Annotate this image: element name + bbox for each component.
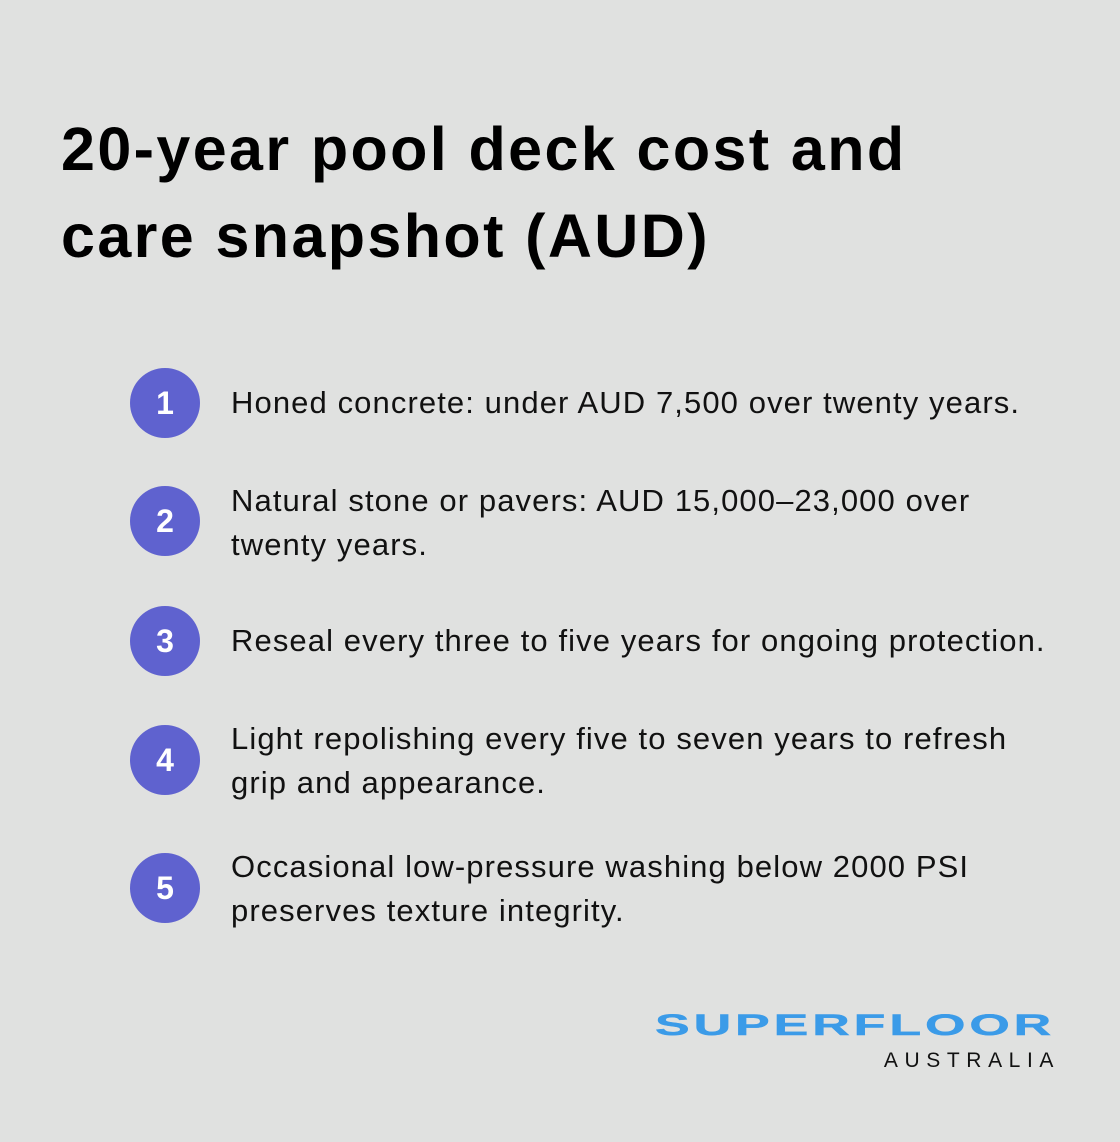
item 5: Occasional low-pressure washing below 2000 PSI bbox=[231, 849, 969, 884]
item 2: twenty years. bbox=[231, 527, 428, 562]
logo: SUPERFLOOR: SUPERFLOOR bbox=[655, 1008, 1055, 1042]
item 5: preserves texture integrity. bbox=[231, 893, 625, 928]
item 2 bbox=[130, 483, 970, 562]
item 4: Light repolishing every five to seven years to refresh bbox=[231, 721, 1007, 756]
item 1: Honed concrete: under AUD 7,500 over twenty years. bbox=[231, 385, 1020, 420]
title: care snapshot (AUD) bbox=[61, 202, 710, 270]
logo bbox=[655, 1008, 1060, 1072]
item 3: 3 bbox=[156, 623, 174, 659]
item 5 bbox=[130, 849, 969, 928]
item 1 bbox=[130, 368, 1020, 438]
item 2: 2 bbox=[156, 503, 174, 539]
item 5: 5 bbox=[156, 870, 174, 906]
item 3: Reseal every three to five years for ongoing protection. bbox=[231, 623, 1046, 658]
item 1: 1 bbox=[156, 385, 174, 421]
title bbox=[61, 115, 907, 270]
item 2: Natural stone or pavers: AUD 15,000–23,000 over bbox=[231, 483, 970, 518]
logo: AUSTRALIA: AUSTRALIA bbox=[884, 1049, 1060, 1072]
item 4: 4 bbox=[156, 742, 174, 778]
item 4 bbox=[130, 721, 1007, 800]
item 3 bbox=[130, 606, 1046, 676]
item 4: grip and appearance. bbox=[231, 765, 546, 800]
title: 20-year pool deck cost and bbox=[61, 115, 907, 183]
